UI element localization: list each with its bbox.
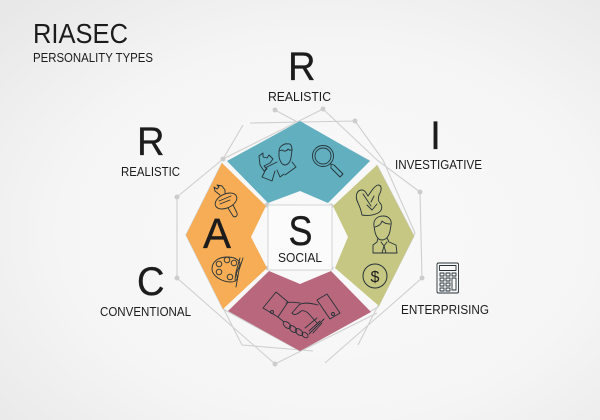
icon: tools bbox=[213, 185, 239, 217]
icon: paint palette bbox=[212, 257, 243, 287]
letter S: S bbox=[288, 207, 312, 254]
label: realistic top: REALISTIC bbox=[268, 90, 331, 104]
letter I: I bbox=[430, 114, 441, 158]
label: conventional: CONVENTIONAL bbox=[100, 305, 191, 319]
icon: calculator bbox=[437, 263, 458, 293]
icon: dollar coin: $ bbox=[371, 269, 380, 286]
icon: mechanic person bbox=[259, 144, 296, 181]
label: enterprising: ENTERPRISING bbox=[401, 303, 489, 317]
panel: orange artistic bbox=[186, 163, 267, 309]
label: social: SOCIAL bbox=[278, 250, 322, 265]
title: RIASEC bbox=[33, 18, 128, 49]
icon: handshake bbox=[263, 292, 340, 339]
subtitle: PERSONALITY TYPES bbox=[33, 50, 153, 65]
icon: pointing hand bbox=[356, 185, 382, 215]
letter R top: R bbox=[288, 45, 316, 89]
label: investigative: INVESTIGATIVE bbox=[395, 158, 482, 172]
panel: teal realistic / investigative bbox=[227, 121, 370, 203]
letter C: C bbox=[137, 260, 164, 304]
icon: dollar coin bbox=[363, 264, 387, 288]
panel: centre social square bbox=[268, 205, 332, 270]
letter A: A bbox=[203, 210, 231, 258]
network nodes bbox=[174, 106, 424, 366]
icon: magnifying glass bbox=[312, 146, 343, 177]
label: realistic left: REALISTIC bbox=[121, 165, 180, 179]
icon: businessman bbox=[373, 216, 397, 253]
letter R left: R bbox=[137, 120, 164, 164]
panel: pink social handshake bbox=[228, 271, 371, 351]
panel: olive investigative / enterprising bbox=[333, 165, 414, 306]
